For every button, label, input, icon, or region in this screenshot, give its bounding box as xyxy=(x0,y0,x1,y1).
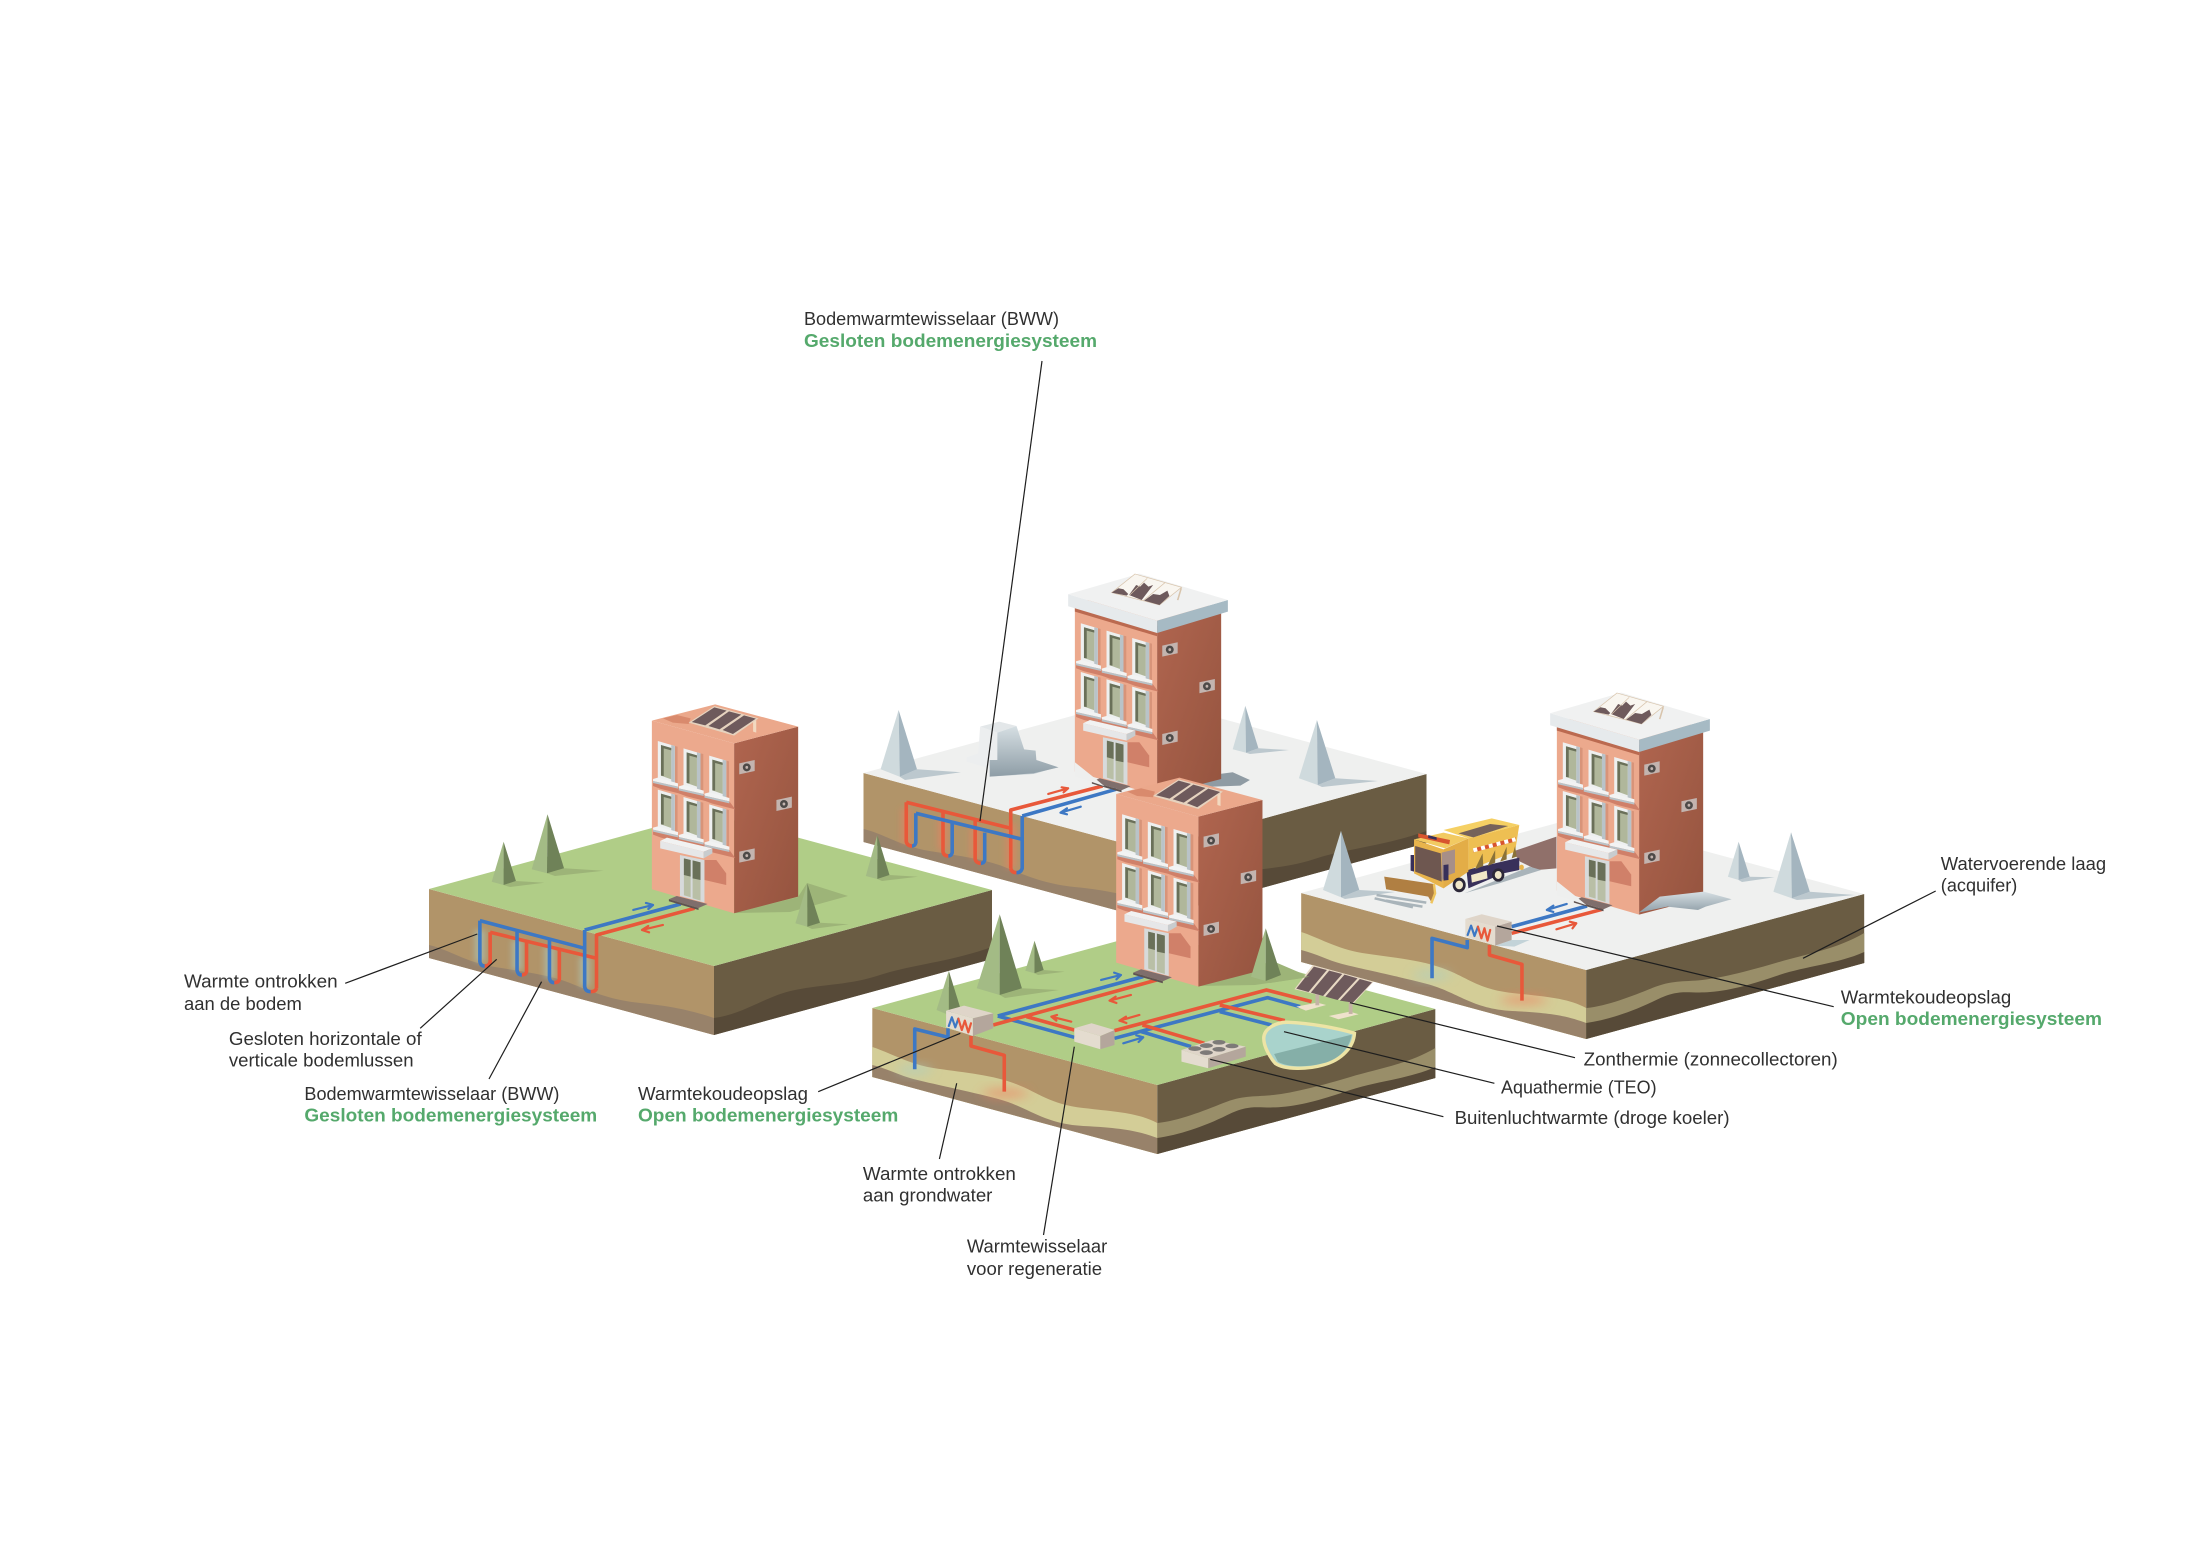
snow heap xyxy=(967,722,1059,777)
callout: Buitenluchtwarmte: Buitenluchtwarmte (droge koeler) xyxy=(1455,1108,1730,1128)
tree xyxy=(1299,720,1378,787)
tree xyxy=(492,842,544,887)
tree xyxy=(936,971,960,1015)
dry cooler xyxy=(1181,1040,1246,1068)
tree xyxy=(881,710,961,780)
tree xyxy=(866,835,918,881)
callout: Warmtewisselaar voor regeneratie: voor regeneratie xyxy=(967,1259,1102,1279)
building with solar panels xyxy=(1116,778,1262,987)
tree xyxy=(795,883,849,929)
callout: Bodemwarmtewisselaar links xyxy=(304,982,597,1126)
callout: Gesloten horizontale of verticale bodemlussen xyxy=(229,959,497,1071)
callout: Gesloten horizontale of verticale bodemlussen: verticale bodemlussen xyxy=(229,1051,414,1071)
building with snow on the roof xyxy=(1550,693,1710,915)
heat loops and pipes xyxy=(906,786,1116,873)
callout: Warmte ontrokken aan grondwater xyxy=(863,1083,1016,1206)
snow plough truck xyxy=(1375,818,1541,907)
panel: block met open bodemenergiesysteem en regeneratie (midden) xyxy=(872,778,1435,1154)
grass top xyxy=(429,813,992,966)
callout: Buitenluchtwarmte xyxy=(1210,1059,1730,1128)
tree xyxy=(532,814,604,876)
pond for aquathermie xyxy=(1264,1022,1354,1068)
block soil xyxy=(872,1008,1435,1154)
tree xyxy=(1728,842,1775,882)
callout: Bodemwarmtewisselaar links: Gesloten bodemenergiesysteem xyxy=(304,1106,597,1126)
tree xyxy=(1251,928,1310,983)
callout: Warmte ontrokken aan de bodem xyxy=(184,934,477,1014)
panel: block met gesloten bodemenergiesysteem in zomer (links) xyxy=(429,704,992,1035)
pipes, branches and groundwater wells xyxy=(898,973,1312,1097)
snow heap beside building xyxy=(1639,892,1732,913)
callout: Watervoerende laag: Watervoerende laag xyxy=(1941,854,2106,874)
tree xyxy=(1773,832,1855,900)
solar collectors xyxy=(1294,965,1374,1019)
callout: Warmtekoudeopslag midden: Warmtekoudeopslag xyxy=(638,1084,808,1104)
pipes and groundwater wells xyxy=(1413,904,1602,1004)
callout: Warmte ontrokken aan grondwater: Warmte ontrokken xyxy=(863,1164,1016,1184)
callout: Bodemwarmtewisselaar links: Bodemwarmtewisselaar (BWW) xyxy=(304,1084,559,1104)
callout: Watervoerende laag: (acquifer) xyxy=(1941,876,2017,896)
callout: Bodemwarmtewisselaar boven xyxy=(804,309,1097,821)
tree xyxy=(977,914,1059,998)
heat storage unit xyxy=(946,1006,993,1036)
callout: Watervoerende laag xyxy=(1803,854,2106,958)
panel: block met open bodemenergiesysteem in winter (rechts) xyxy=(1301,693,1864,1039)
callout: Zonthermie: Zonthermie (zonnecollectoren) xyxy=(1584,1050,1838,1070)
callout: Warmtekoudeopslag rechts xyxy=(1497,926,2102,1029)
callout: Warmtekoudeopslag midden xyxy=(638,1033,960,1126)
building shadow xyxy=(734,883,848,913)
tree xyxy=(1025,941,1065,975)
block soil xyxy=(1301,893,1864,1039)
tree xyxy=(1323,831,1395,899)
callout: Zonthermie xyxy=(1350,1003,1838,1070)
callout: Warmte ontrokken aan grondwater: aan grondwater xyxy=(863,1186,992,1206)
tree xyxy=(1233,706,1289,754)
panel: block met gesloten bodemenergiesysteem in winter (achter) xyxy=(864,574,1426,919)
building shadow xyxy=(1198,962,1310,986)
heat loops and pipes xyxy=(480,903,695,992)
callout: Bodemwarmtewisselaar boven: Bodemwarmtewisselaar (BWW) xyxy=(804,309,1059,329)
block soil xyxy=(864,773,1426,919)
building with solar panels xyxy=(652,704,798,913)
block soil xyxy=(429,889,992,1035)
callout: Warmtekoudeopslag rechts: Warmtekoudeopslag xyxy=(1841,987,2011,1007)
building with snow on the roof xyxy=(1068,574,1228,796)
callout: Warmtewisselaar voor regeneratie: Warmtewisselaar xyxy=(967,1237,1107,1257)
callout: Warmtewisselaar voor regeneratie xyxy=(967,1047,1107,1279)
callout: Gesloten horizontale of verticale bodemlussen: Gesloten horizontale of xyxy=(229,1029,423,1049)
callout: Warmtekoudeopslag midden: Open bodemenergiesysteem xyxy=(638,1106,898,1126)
callout: Warmtekoudeopslag rechts: Open bodemenergiesysteem xyxy=(1841,1009,2102,1029)
snow heap behind front building xyxy=(1187,772,1250,790)
heat storage unit xyxy=(1465,914,1512,946)
regeneration heat exchanger xyxy=(1074,1023,1114,1049)
building shadow on snow xyxy=(1512,837,1556,870)
callout: Aquathermie xyxy=(1284,1032,1657,1097)
callout: Bodemwarmtewisselaar boven: Gesloten bodemenergiesysteem xyxy=(804,331,1097,351)
callout: Warmte ontrokken aan de bodem: aan de bodem xyxy=(184,994,302,1014)
snow ground top xyxy=(864,697,1426,850)
snow ground top xyxy=(1301,817,1864,970)
grass top xyxy=(872,932,1435,1085)
callout: Aquathermie: Aquathermie (TEO) xyxy=(1501,1077,1657,1097)
callout: Warmte ontrokken aan de bodem: Warmte ontrokken xyxy=(184,972,338,992)
